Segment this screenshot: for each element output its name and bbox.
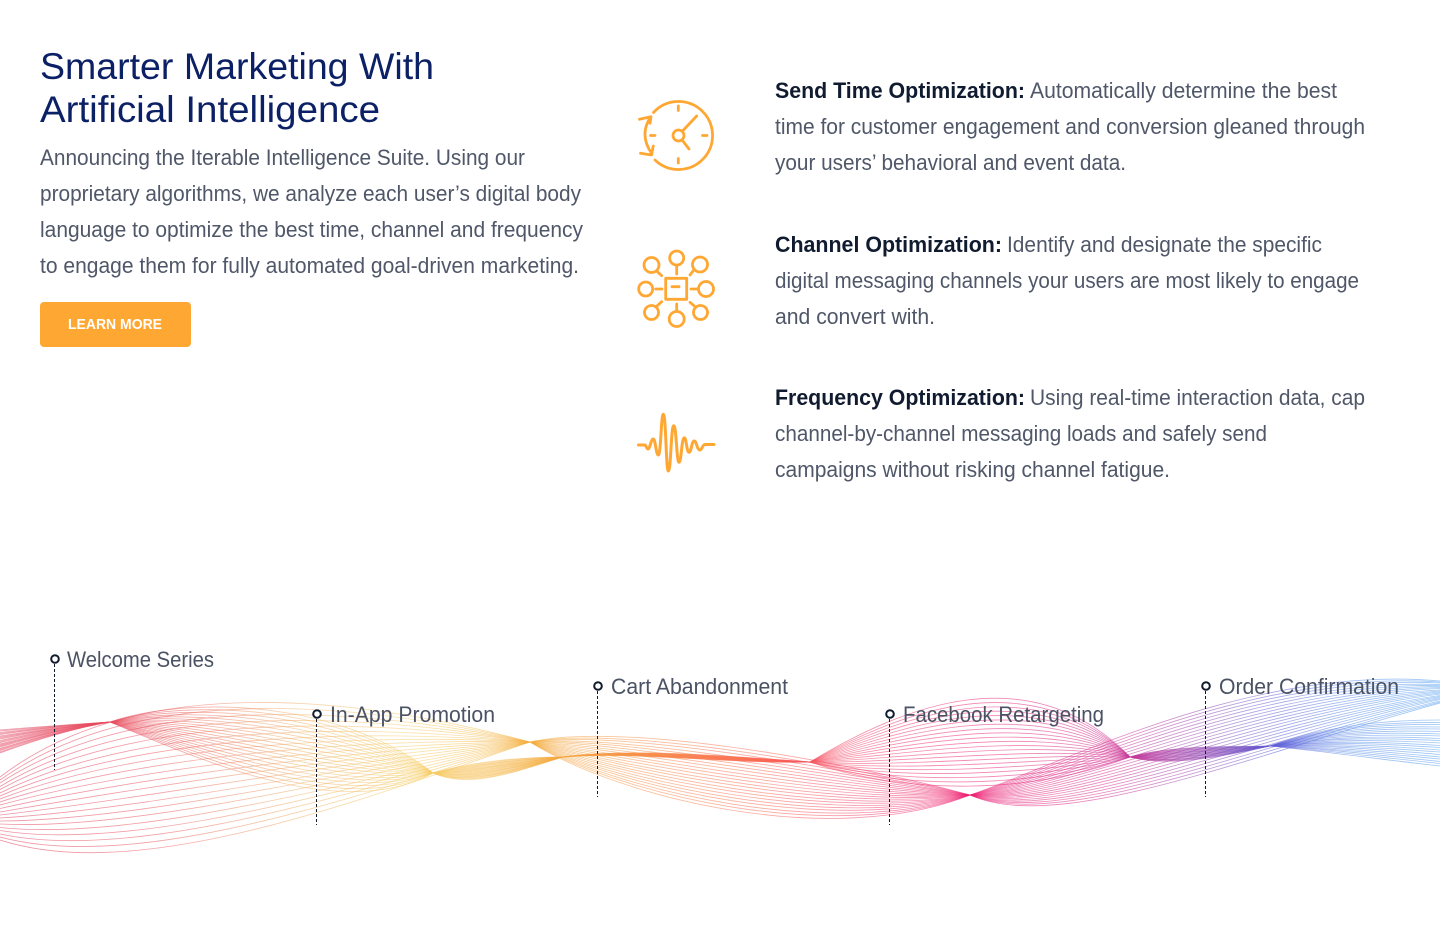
text: channel optimization — [775, 232, 1359, 329]
text: frequency optimization: Frequency Optimization: — [775, 385, 1025, 410]
text: frequency optimization: campaigns without risking channel fatigue. — [775, 457, 1170, 482]
chart: flowing ribbon journey — [0, 679, 1440, 853]
intro text block: Announcing the Iterable Intelligence Suite. Using our — [40, 145, 525, 170]
intro text block: proprietary algorithms, we analyze each user’s digital body — [40, 181, 581, 206]
text: send time optimization — [775, 78, 1365, 175]
ribbon: narrow strand — [0, 698, 1440, 792]
text: channel optimization: Channel Optimization: — [775, 232, 1002, 257]
text: channel optimization: digital messaging channels your users are most likely to engage — [775, 268, 1359, 293]
text: channel optimization: Identify and designate the specific — [1007, 232, 1322, 257]
text: channel optimization: and convert with. — [775, 304, 935, 329]
marker: facebook retargeting — [886, 702, 1104, 825]
button: learn more — [40, 302, 191, 347]
text: send time optimization: time for customer engagement and conversion gleaned through — [775, 114, 1365, 139]
marker: in-app promotion — [313, 702, 495, 825]
marker: order confirmation — [1202, 674, 1399, 797]
title: Smarter Marketing With — [40, 46, 434, 87]
marker: facebook retargeting: Facebook Retargeting — [903, 702, 1104, 727]
icon: frequency wave — [638, 414, 714, 471]
button: learn more: LEARN MORE — [68, 316, 162, 333]
text: frequency optimization — [775, 385, 1365, 482]
marker: welcome series: Welcome Series — [67, 647, 214, 672]
marker: order confirmation: Order Confirmation — [1219, 674, 1399, 699]
marker: cart abandonment: Cart Abandonment — [611, 674, 788, 699]
marker: welcome series — [51, 647, 214, 770]
icon: clock with cycle arrows — [640, 101, 713, 169]
text: send time optimization: Send Time Optimization: — [775, 78, 1025, 103]
text: frequency optimization: Using real-time interaction data, cap — [1030, 385, 1365, 410]
text: send time optimization: your users’ behavioral and event data. — [775, 150, 1126, 175]
ribbon: wide sheet — [0, 679, 1440, 853]
marker: cart abandonment — [594, 674, 788, 797]
title: Artificial Intelligence — [40, 89, 380, 130]
marker: in-app promotion: In-App Promotion — [330, 702, 495, 727]
icon: channel network — [639, 251, 714, 326]
intro text block: to engage them for fully automated goal-driven marketing. — [40, 253, 579, 278]
intro text block — [40, 145, 583, 278]
text: send time optimization: Automatically determine the best — [1030, 78, 1337, 103]
title — [40, 46, 434, 130]
intro text block: language to optimize the best time, channel and frequency — [40, 217, 583, 242]
text: frequency optimization: channel-by-channel messaging loads and safely send — [775, 421, 1267, 446]
